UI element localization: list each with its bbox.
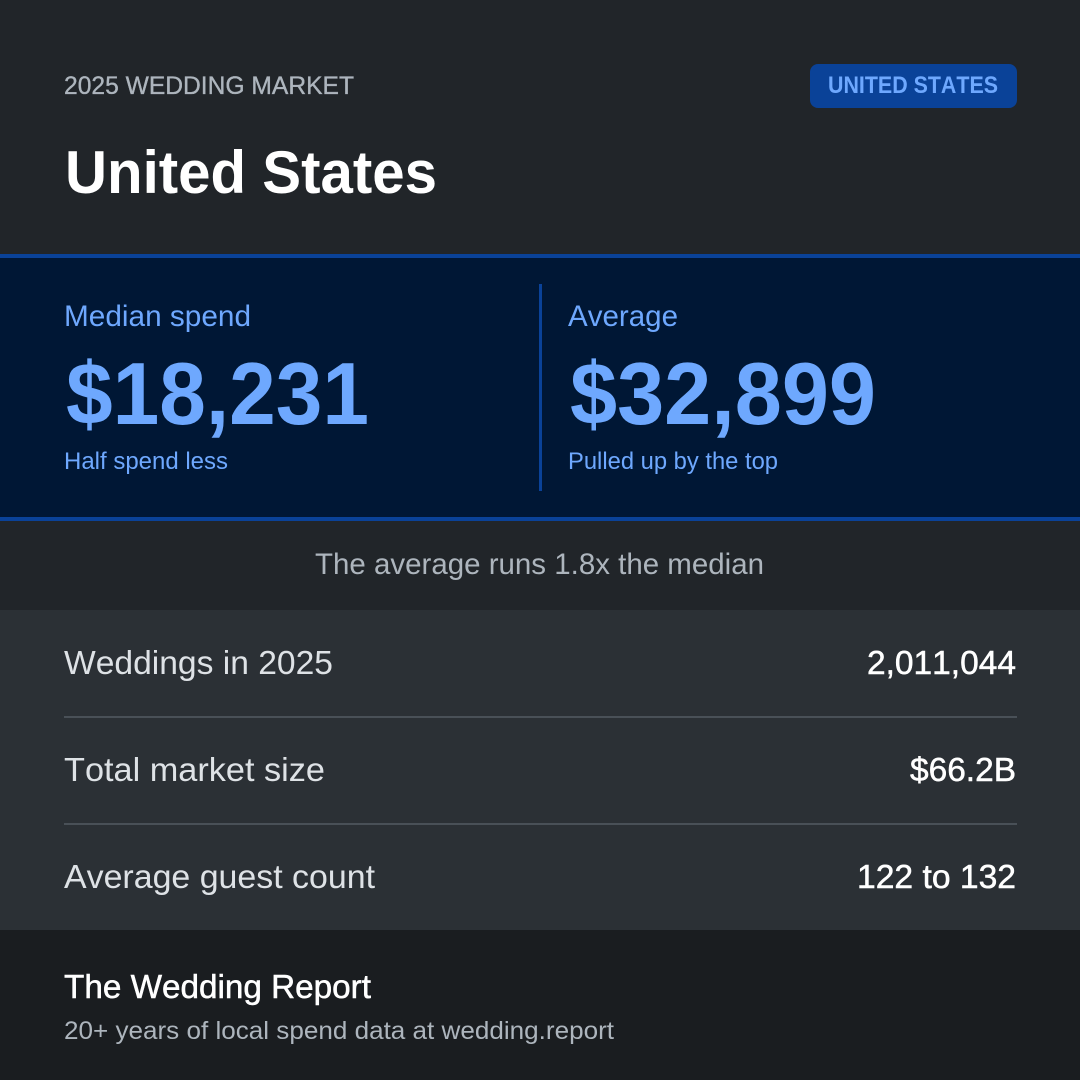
footer [0,930,1080,1080]
row: weddings [64,644,1016,681]
eyebrow label: 2025 WEDDING MARKET [64,72,354,100]
average spend: $32,899 [570,344,876,443]
row: guest count: 122 to 132 [857,858,1016,895]
row: market size: Total market size [64,751,325,788]
median spend: Median spend [64,300,251,333]
title: United States [65,139,437,206]
row: weddings: Weddings in 2025 [64,644,333,681]
row: market size: $66.2B [910,751,1016,788]
comparison note: The average runs 1.8x the median [315,548,764,581]
median spend: $18,231 [66,344,369,443]
region badge: UNITED STATES [828,72,998,99]
row: guest count [64,858,1016,895]
row: guest count: Average guest count [64,858,375,895]
brand name: The Wedding Report [64,968,371,1005]
median spend [64,300,369,475]
average spend: Average [568,300,678,333]
row: weddings: 2,011,044 [867,644,1016,681]
median spend: Half spend less [64,448,228,475]
header [64,64,1017,206]
average spend [568,300,876,475]
average spend: Pulled up by the top [568,448,778,475]
source line: 20+ years of local spend data at wedding.report [64,1017,614,1045]
panel: spend figures [0,254,1080,521]
region badge [810,64,1017,108]
row: market size [64,751,1016,788]
panel: market stats [0,610,1080,930]
